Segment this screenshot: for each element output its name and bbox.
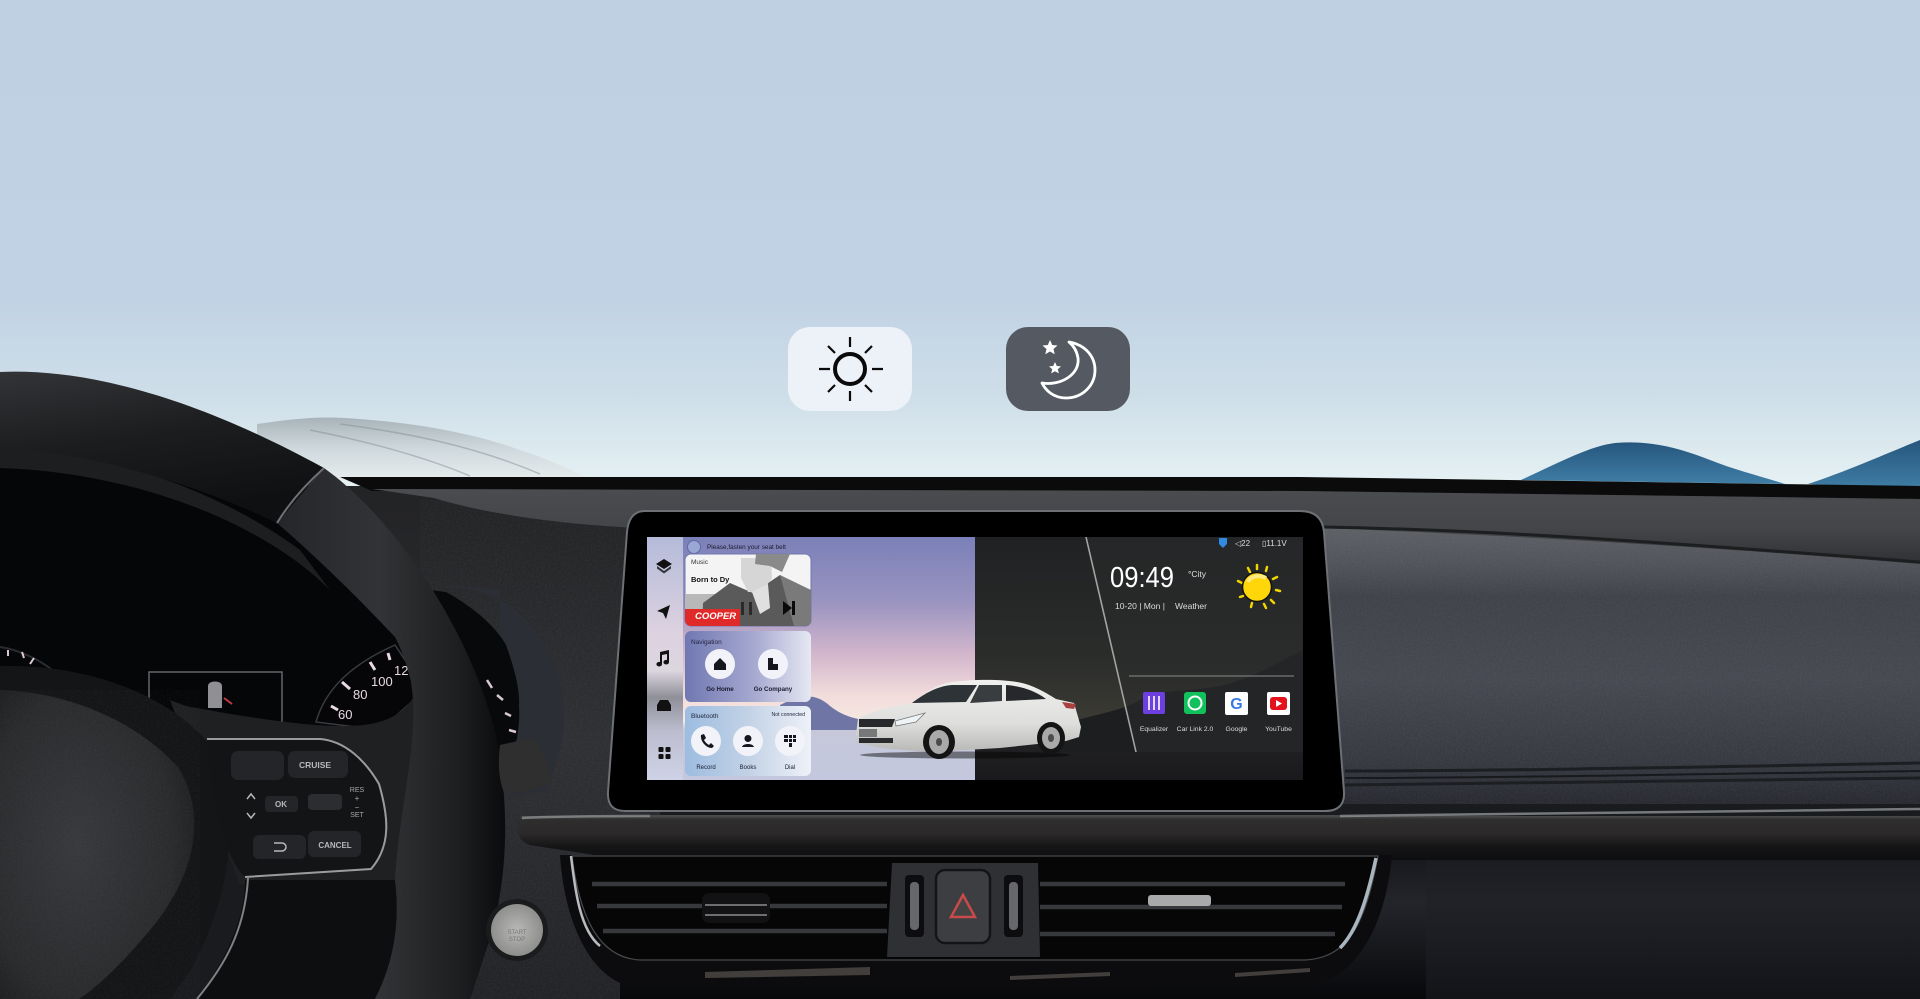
weather label: Weather bbox=[1175, 601, 1207, 611]
left dashboard section bbox=[300, 486, 660, 999]
app: Google: Google bbox=[1226, 726, 1248, 733]
speedometer: 60 bbox=[338, 707, 352, 722]
chrome line middle bbox=[650, 815, 1340, 817]
right gauge ticks bbox=[487, 680, 516, 732]
app row divider bbox=[1129, 675, 1294, 677]
right dial bbox=[1004, 875, 1023, 937]
res set labels bbox=[350, 787, 365, 819]
pause icon bbox=[741, 602, 752, 615]
bluetooth card: Not connected bbox=[772, 712, 805, 718]
wheel lower rim bbox=[277, 468, 505, 999]
hub leather grain bbox=[0, 690, 200, 999]
speedometer: 100 bbox=[371, 674, 393, 689]
chrome line left bbox=[522, 816, 650, 818]
rim joint highlight bbox=[277, 468, 324, 523]
car body bbox=[855, 680, 1081, 752]
dashboard bbox=[0, 477, 1920, 999]
lower dash bbox=[620, 850, 1920, 999]
cancel button: CANCEL bbox=[318, 841, 352, 850]
right dashboard pad bbox=[1322, 528, 1920, 804]
screen bbox=[647, 537, 1303, 780]
icon: weather sun bbox=[1238, 565, 1280, 608]
status bar: ◁22 bbox=[1235, 539, 1251, 548]
engine start button bbox=[486, 899, 548, 961]
day half mountain bbox=[780, 696, 858, 730]
city label: °City bbox=[1188, 569, 1207, 579]
instrument pod hood bbox=[442, 584, 564, 800]
lower spoke chrome line bbox=[197, 878, 248, 999]
leather grain right pad bbox=[1348, 618, 1910, 804]
instrument pod interior bbox=[430, 590, 519, 770]
dial button bbox=[775, 726, 805, 756]
res set labels: SET bbox=[350, 812, 365, 819]
crease shadow bbox=[1322, 527, 1920, 562]
stalk bbox=[499, 738, 552, 795]
pad stitching bbox=[1345, 763, 1920, 785]
clock: 09:49 bbox=[1110, 562, 1174, 594]
date: 10-20 | Mon | bbox=[1115, 601, 1165, 611]
night mode button bbox=[1006, 327, 1130, 411]
centre air vents bbox=[560, 855, 1392, 988]
app: YouTube: YouTube bbox=[1265, 726, 1292, 733]
side window front bbox=[970, 685, 1002, 703]
cancel button bbox=[308, 831, 361, 857]
base dark fill bbox=[0, 486, 1920, 999]
music card: Music bbox=[691, 559, 709, 566]
side window rear bbox=[1006, 685, 1046, 701]
res set labels: + bbox=[355, 794, 360, 803]
cruise button: CRUISE bbox=[299, 760, 331, 770]
music card: Born to Dy bbox=[691, 575, 730, 584]
volume rocker bbox=[247, 794, 255, 818]
OK button bbox=[265, 796, 298, 812]
steering wheel control panel bbox=[207, 739, 386, 877]
album label bbox=[685, 609, 740, 626]
status bar bbox=[1219, 538, 1287, 548]
navigation card: Go Company bbox=[754, 686, 793, 693]
album photo: COOPER bbox=[695, 611, 736, 622]
left snowy mountain bbox=[257, 417, 593, 480]
vent slats bbox=[592, 884, 1345, 934]
left vent knob bbox=[702, 893, 770, 923]
car bbox=[855, 680, 1081, 759]
mode button bbox=[231, 751, 284, 780]
chrome outline bbox=[207, 739, 386, 877]
speedometer: 12 bbox=[394, 663, 408, 678]
bluetooth card bbox=[685, 706, 811, 776]
bluetooth card: Bluetooth bbox=[691, 713, 719, 720]
cluster hood leather bbox=[0, 446, 330, 590]
app: Google bbox=[1225, 692, 1248, 733]
sidebar icons bbox=[656, 559, 672, 759]
trim bar bbox=[517, 816, 1920, 860]
sidebar bbox=[647, 537, 683, 780]
status bar: ▯11.1V bbox=[1262, 539, 1287, 548]
cruise button bbox=[288, 751, 348, 778]
front wheel bbox=[923, 725, 955, 759]
seat belt notice bbox=[688, 540, 786, 554]
go home button bbox=[705, 649, 735, 679]
speedometer: 80 bbox=[353, 687, 367, 702]
music card bbox=[685, 554, 811, 626]
res set labels: − bbox=[355, 803, 360, 812]
right vent knob bbox=[1148, 895, 1211, 906]
wheel horn pad bbox=[0, 690, 194, 999]
night hills bbox=[1079, 672, 1303, 730]
left dial bbox=[905, 875, 924, 937]
app: Car Link 2.0: Car Link 2.0 bbox=[1177, 726, 1214, 733]
speedometer bbox=[316, 645, 425, 730]
steering wheel spoke bbox=[170, 680, 430, 890]
blank button bbox=[308, 794, 342, 810]
grille bbox=[859, 719, 895, 727]
glove box section bbox=[1426, 860, 1920, 999]
right blue mountains bbox=[1521, 440, 1920, 490]
upper dashboard band bbox=[372, 489, 1920, 570]
vent surround bbox=[560, 855, 1392, 988]
night half background bbox=[975, 537, 1303, 780]
hazard triangle bbox=[951, 895, 975, 917]
night slanted panel bbox=[1086, 537, 1303, 752]
chrome line right bbox=[1340, 809, 1920, 816]
lower grille bbox=[859, 729, 877, 737]
engine start button: STOP bbox=[509, 937, 525, 943]
head unit bezel bbox=[608, 511, 1344, 811]
right chrome vent edge bbox=[1340, 858, 1376, 948]
sky background bbox=[0, 0, 1920, 500]
left gauge bbox=[0, 647, 55, 672]
wheel upper rim bbox=[0, 372, 324, 523]
left dashboard grain bbox=[420, 500, 640, 999]
res set labels: RES bbox=[350, 787, 365, 794]
trip computer display bbox=[149, 672, 282, 722]
left chrome vent edge bbox=[571, 856, 600, 946]
app: Equalizer bbox=[1140, 692, 1169, 733]
record button bbox=[691, 726, 721, 756]
back button bbox=[253, 835, 306, 859]
rear wheel bbox=[1037, 722, 1065, 754]
glossy reflections bbox=[705, 967, 1310, 980]
cluster interior bbox=[0, 440, 425, 780]
bluetooth card: Dial bbox=[785, 765, 795, 771]
go company button bbox=[758, 649, 788, 679]
bluetooth card: Books bbox=[740, 765, 756, 771]
app: YouTube bbox=[1265, 692, 1292, 733]
slanted divider bbox=[1086, 537, 1136, 752]
day half background bbox=[683, 537, 975, 780]
icon: sun bbox=[819, 337, 883, 401]
vent opening bbox=[572, 856, 1378, 960]
next icon bbox=[783, 601, 795, 615]
navigation card bbox=[685, 631, 811, 702]
books button bbox=[733, 726, 763, 756]
app: Google: G bbox=[1230, 696, 1243, 713]
hazard panel bbox=[887, 863, 1040, 957]
navigation card: Go Home bbox=[706, 686, 734, 693]
seat belt notice: Please,fasten your seat belt bbox=[707, 544, 786, 551]
lower air dam bbox=[859, 738, 893, 743]
engine start button: START bbox=[507, 930, 527, 936]
windshield bbox=[912, 685, 977, 703]
bluetooth card: Record bbox=[696, 765, 716, 771]
headlight bbox=[895, 713, 925, 726]
control panel base bbox=[207, 739, 386, 877]
icon: moon and stars bbox=[1042, 340, 1095, 398]
app: Equalizer: Equalizer bbox=[1140, 726, 1169, 733]
wheel hub bbox=[0, 666, 230, 999]
app: Car Link 2.0 bbox=[1177, 692, 1214, 733]
hazard button bbox=[936, 870, 990, 943]
lower spoke cavity bbox=[198, 880, 397, 999]
navigation card: Navigation bbox=[691, 639, 722, 646]
windshield base black band bbox=[340, 477, 1920, 499]
OK button: OK bbox=[275, 800, 287, 809]
tail light bbox=[1062, 702, 1076, 709]
day mode button bbox=[788, 327, 912, 411]
